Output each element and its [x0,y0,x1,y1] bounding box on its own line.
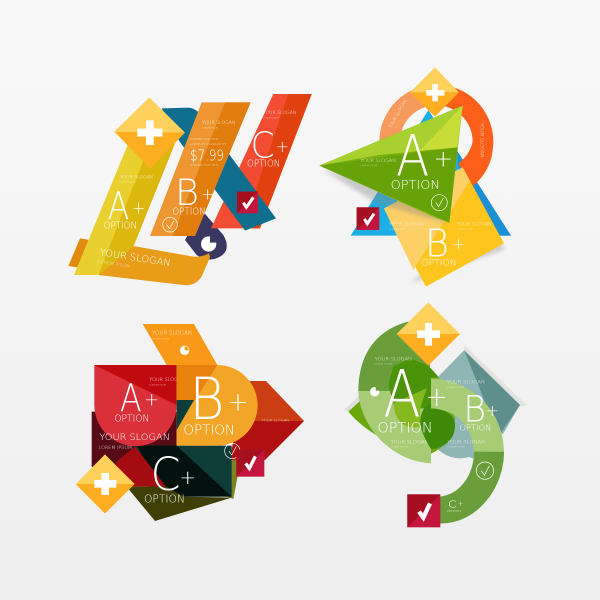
big green swirl: YOUR SLOGAN [391,440,428,446]
big A label: OPTION [377,420,433,436]
panel: ribbon infographic top left [68,94,312,285]
panel: option A triangle: + [434,144,453,172]
orange back tab [68,238,93,268]
big A label [377,357,448,436]
right red arrow: YOUR SLOGAN [262,418,289,422]
panel: option A band: A [108,184,129,228]
panel: orange B: B [189,365,224,433]
panel: option B band: LOREM IPSUM [202,127,218,129]
icon: plus diamond [114,97,185,168]
panel: option A band: YOUR SLOGAN [120,175,153,181]
S band: OPTION [447,509,461,513]
panel: option A triangle: A [396,123,429,189]
big green swirl: LOREM IPSUM [375,364,392,366]
right red arrow [230,381,304,460]
icon: plus diamond [76,454,135,514]
icon: pie [201,236,216,252]
S band: + [458,500,463,508]
icon: check circle [163,217,177,232]
S band: LOREM IPSUM [447,387,464,389]
panel: red A: YOUR SLOGAN [149,377,185,383]
icon: check badge [407,494,440,527]
panel: arrows infographic bottom left [76,324,304,521]
navy pill with pie icon [185,210,227,260]
dark panel C: C [151,448,181,501]
panel: option B square [384,167,507,287]
panel: option B band [150,102,251,236]
panel: option B square: + [452,235,466,254]
panel: option A band: OPTION [104,220,137,231]
panel: option A triangle [319,106,463,223]
top orange tab: LOREM IPSUM [152,338,170,340]
panel: red A [94,365,185,451]
check badge [237,192,258,213]
icon: pie [370,386,380,396]
panel: option B band: B [175,171,199,214]
panel: option B square: LOREM IPSUM [389,229,405,231]
slogan on ribbon: YOUR SLOGAN [99,247,171,269]
ring slogans: YOUR SLOGAN [479,123,485,158]
panel: option C band: LOREM IPSUM [263,118,279,120]
panel: option A band: + [132,199,146,218]
panel: option A band: LOREM IPSUM [120,182,136,184]
panel: option B band: OPTION [172,207,206,218]
icon: check circle [476,462,494,479]
S band: LOREM IPSUM [447,447,465,449]
panel: red A: LOREM IPSUM [99,445,132,451]
leaf behind [348,375,455,455]
dark panel C: + [180,466,196,489]
panel: option C band: OPTION [247,159,280,170]
icon: check badge [236,450,264,477]
S band: YOUR SLOGAN [447,380,485,386]
S band: + [486,401,499,420]
slogan C: YOUR SLOGAN [263,110,296,116]
panel: red A: OPTION [114,414,149,425]
panel: option A triangle: YOUR SLOGAN [360,158,396,164]
panel: option B band: $7.99 [190,147,224,164]
big A label: + [425,382,448,413]
panel: orange B: OPTION [183,423,235,438]
icon: plus diamond [397,302,460,366]
big green swirl: YOUR SLOGAN [375,356,412,362]
big green swirl: LOREM IPSUM [391,447,408,449]
panel: option B band: RANDOM TEXT INFO [190,137,218,141]
ring overlap right [458,142,493,188]
S band: B [463,388,486,431]
S band: C [448,500,457,511]
slogan on ribbon: LOREM IPSUM [97,259,130,270]
panel: option C band: + [276,137,289,156]
ring [379,88,494,156]
top orange tab [143,324,217,365]
panel: option A band [74,143,175,275]
top orange tab: YOUR SLOGAN [152,330,192,336]
ring slogans [388,99,485,158]
panel: orange B [177,365,258,446]
dark panel C [92,412,232,521]
panel: red A: LOREM IPSUM [149,384,166,386]
big A label: A [383,357,421,433]
teal band [162,108,276,231]
panel: option B band: RANDOM TEXT INFO [190,163,218,167]
icon: plus diamond [410,67,459,117]
icon: pie [180,346,189,355]
panel: option A triangle: LOREM IPSUM [360,165,377,167]
blue triangle [351,110,511,236]
panel: option B band: YOUR SLOGAN [202,120,235,126]
panel: option B square: B [425,222,449,267]
S band: YOUR SLOGAN [447,440,485,446]
icon: check badge [357,207,379,230]
icon: check circle [225,443,240,459]
panel: red A: + [144,390,159,411]
panel: option B square: OPTION [421,259,457,269]
panel: option B square: YOUR SLOGAN [457,222,492,228]
panel: option B square: LOREM IPSUM [457,229,473,231]
big green swirl [358,322,438,463]
panel: triangle infographic top right [319,67,511,287]
panel: orange B: + [227,386,249,416]
panel: red A: A [120,377,142,422]
panel: option B square: YOUR SLOGAN [389,222,424,228]
panel: option B band: LOREM IPSUM DOLOR SIT [190,142,226,146]
panel: option C band [211,94,312,228]
panel: red A: YOUR SLOGAN [99,433,170,443]
panel: swirl infographic bottom right [344,302,527,527]
S band: OPTION [459,422,491,432]
orange slogan band [98,246,210,285]
teal diamond [428,350,520,458]
panel: option A triangle: OPTION [391,178,440,192]
S band [420,378,504,523]
icon: check circle [431,195,447,211]
panel: option B band: + [201,184,214,203]
back shadow [344,345,527,415]
C plus: C [251,125,275,166]
dark panel C: OPTION [144,493,185,506]
ring slogans: YOUR SLOGAN [388,99,409,129]
olive side [227,460,241,499]
